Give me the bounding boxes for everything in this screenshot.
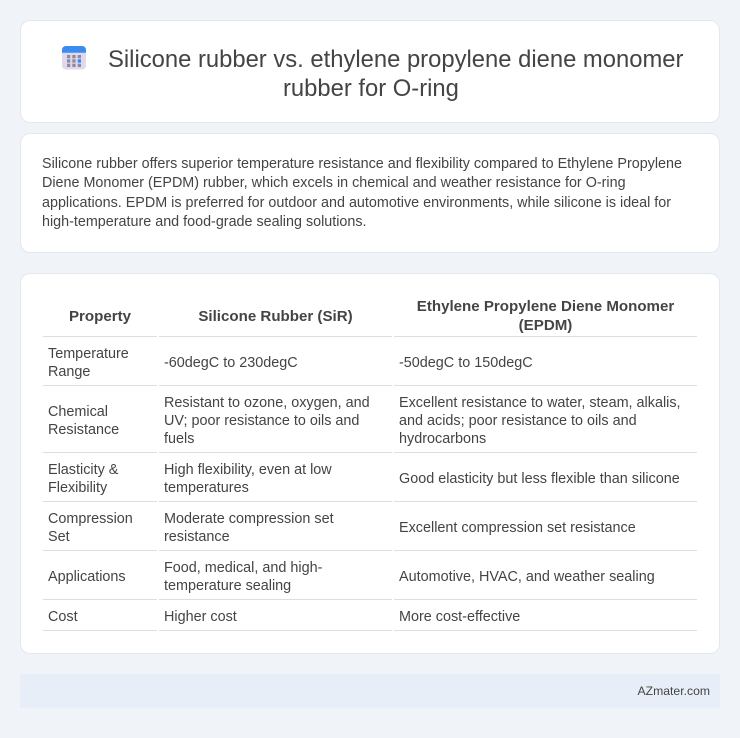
table header: Silicone Rubber (SiR) (198, 308, 353, 325)
row: compression set: Set (48, 529, 70, 545)
footer text: AZmater.com: AZmater.com (638, 684, 710, 698)
footer bar (20, 674, 720, 708)
row: chemical resistance: Resistant to ozone, oxygen, and (164, 395, 370, 411)
row: temperature range (48, 346, 533, 380)
title (108, 46, 684, 102)
row: compression set: resistance (164, 529, 230, 545)
row: cost (48, 609, 520, 625)
title: rubber for O-ring (283, 75, 459, 102)
row: applications (48, 560, 655, 594)
row: temperature range: Temperature (48, 346, 129, 362)
row: compression set: Excellent compression set resistance (399, 520, 636, 536)
icon: calendar (62, 46, 86, 70)
row: chemical resistance: Resistance (48, 422, 119, 438)
panel: comparison table (20, 273, 720, 654)
text block: summary: applications. EPDM is preferred for outdoor and automotive environments, while silicone is ideal for (42, 195, 671, 211)
row: temperature range: -60degC to 230degC (164, 355, 298, 371)
row: temperature range: -50degC to 150degC (399, 355, 533, 371)
panel: summary (20, 133, 720, 253)
row: chemical resistance: UV; poor resistance to oils and (164, 413, 359, 429)
row: temperature range: Range (48, 364, 90, 380)
row: applications: Automotive, HVAC, and weather sealing (399, 569, 655, 585)
row: chemical resistance: Excellent resistance to water, steam, alkalis, (399, 395, 681, 411)
row: elasticity: temperatures (164, 480, 249, 496)
text block: summary: high-temperature and food-grade sealing solutions. (42, 214, 367, 230)
table header: Ethylene Propylene Diene Monomer (417, 298, 674, 315)
table header: (EPDM) (519, 317, 572, 334)
row: applications: Applications (48, 569, 126, 585)
row: chemical resistance: Chemical (48, 404, 108, 420)
row: applications: Food, medical, and high- (164, 560, 322, 576)
row: cost: Cost (48, 609, 78, 625)
table header (69, 298, 674, 334)
row: chemical resistance: hydrocarbons (399, 431, 486, 447)
panel: title card (20, 20, 720, 123)
row: cost: More cost-effective (399, 609, 520, 625)
text block: summary: Diene Monomer (EPDM) rubber, which excels in chemical and weather resistance for O-ring (42, 175, 626, 191)
row: elasticity: Elasticity & (48, 462, 118, 478)
text block: summary: Silicone rubber offers superior temperature resistance and flexibility compared to Ethylene Propylene (42, 156, 682, 172)
row: compression set: Moderate compression set (164, 511, 334, 527)
row: chemical resistance (48, 395, 681, 447)
row: chemical resistance: and acids; poor resistance to oils and (399, 413, 637, 429)
row: cost: Higher cost (164, 609, 237, 625)
row: chemical resistance: fuels (164, 431, 194, 447)
row: elasticity: Good elasticity but less flexible than silicone (399, 471, 680, 487)
row: compression set (48, 511, 636, 545)
table header: Property (69, 308, 131, 325)
title: Silicone rubber vs. ethylene propylene diene monomer (108, 46, 683, 73)
row: elasticity: High flexibility, even at low (164, 462, 332, 478)
row: elasticity (48, 462, 680, 496)
text block: summary (42, 156, 682, 230)
row: elasticity: Flexibility (48, 480, 107, 496)
row: compression set: Compression (48, 511, 133, 527)
row: applications: temperature sealing (164, 578, 291, 594)
